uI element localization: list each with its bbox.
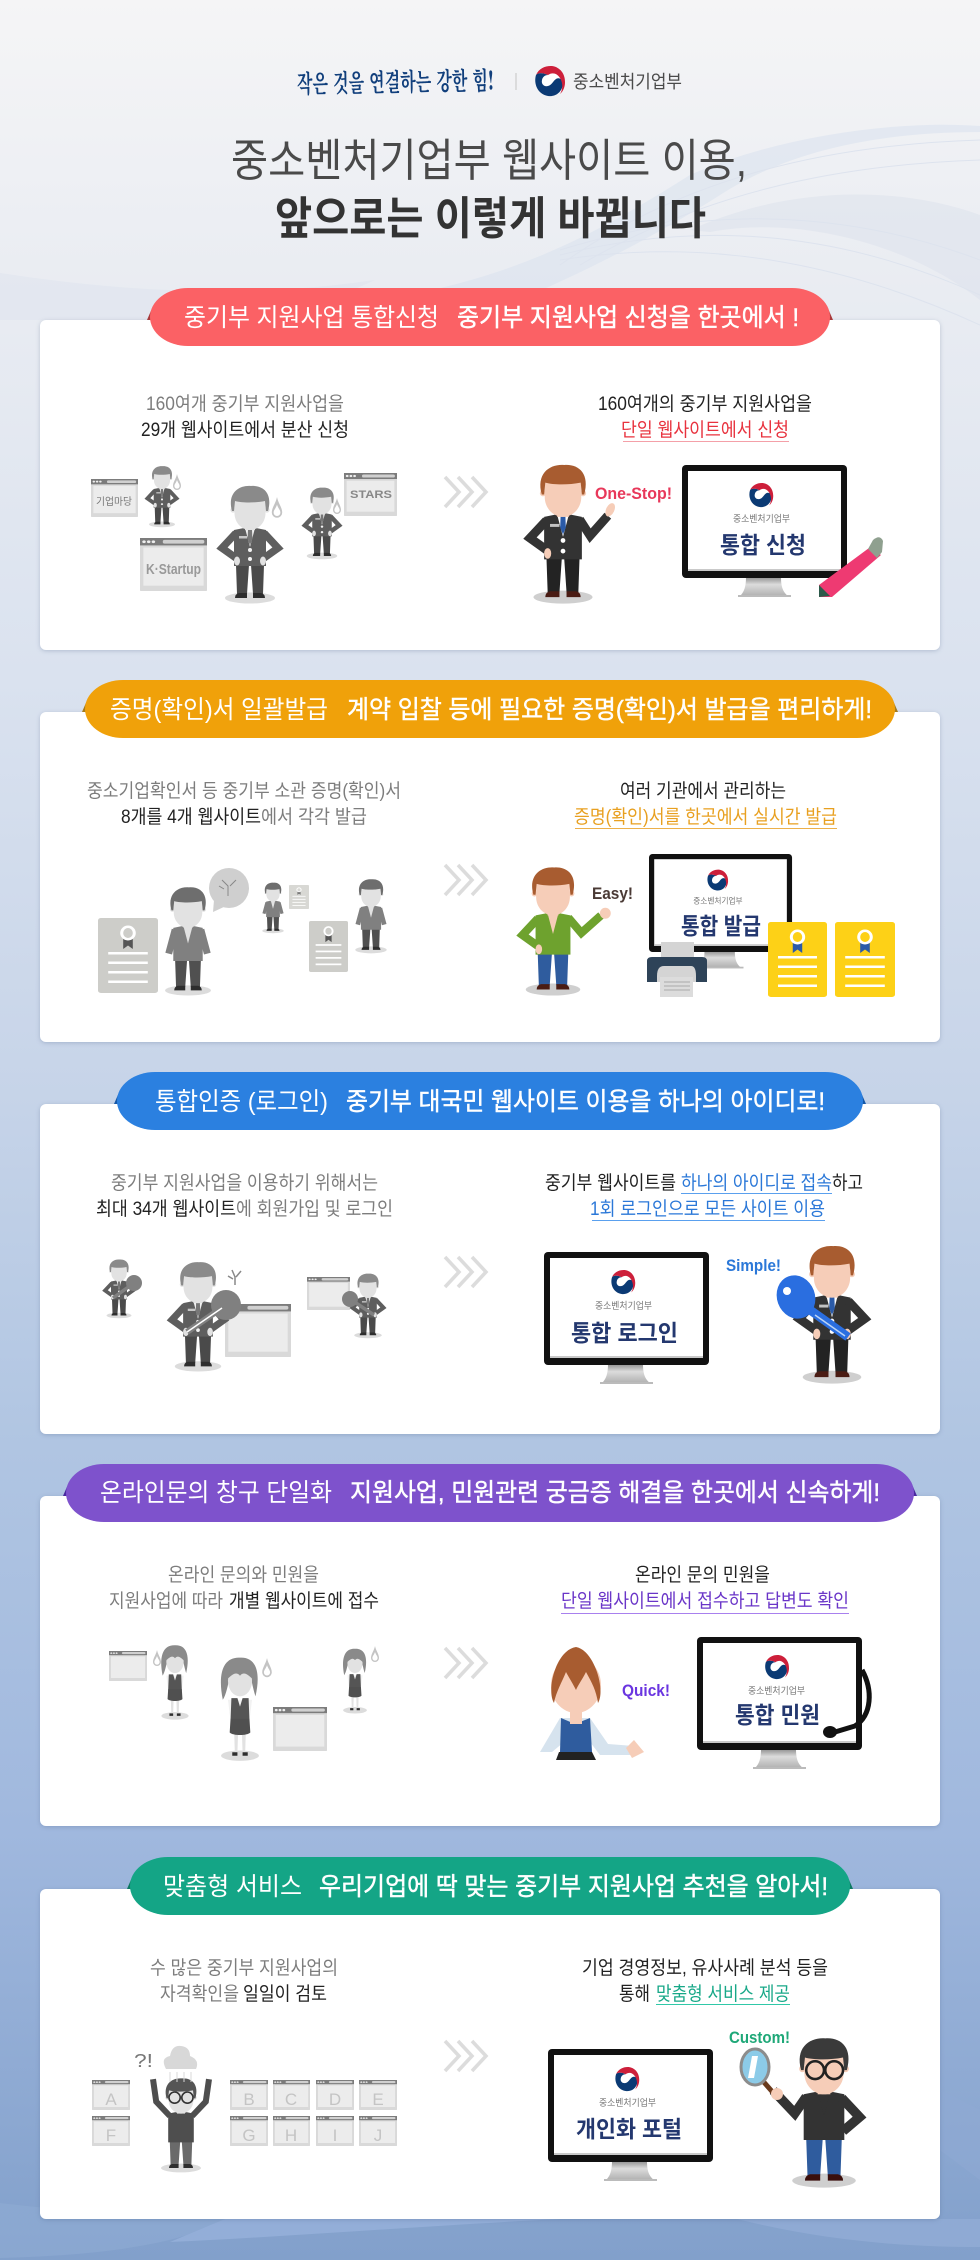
text before: 중소기업확인서 등 중기부 소관 증명(확인)서 (87, 780, 401, 802)
text before: 지원사업에 따라 (109, 1590, 223, 1612)
illustration before (91, 466, 397, 604)
text before: 일일이 검토 (243, 1983, 327, 2005)
text after: 단일 웹사이트에서 신청 (621, 419, 789, 441)
illustration before: ?! (134, 2051, 153, 2071)
illustration after: man, monitor, printer, certificates: Easy! (592, 884, 633, 903)
text before (150, 1957, 338, 2005)
title: 중소벤처기업부 웹사이트 이용, (231, 135, 747, 186)
illustration after: monitor and man with key: Simple! (726, 1256, 781, 1275)
illustration after: man and monitor: 통합 신청 (720, 532, 806, 558)
header logos (297, 61, 682, 101)
illustration after: agent and monitor (540, 1637, 869, 1769)
card background (40, 1104, 940, 1434)
illustration after: man, monitor, printer, certificates (522, 854, 895, 997)
pill heading (82, 680, 898, 738)
title: 앞으로는 이렇게 바뀝니다 (275, 193, 706, 244)
text after: 여러 기관에서 관리하는 (620, 780, 786, 802)
text before: 온라인 문의와 민원을 (168, 1564, 319, 1586)
text after: 중기부 웹사이트를 (545, 1172, 676, 1194)
card background (40, 712, 940, 1042)
arrow (445, 1257, 486, 1287)
background waves bottom (0, 2090, 980, 2258)
illustration before: B (243, 2090, 255, 2109)
text before (96, 1172, 393, 1220)
text after: 증명(확인)서를 한곳에서 실시간 발급 (574, 806, 837, 828)
panel: integrated application (40, 288, 940, 650)
ministry emblem (535, 66, 565, 96)
illustration before: A (105, 2090, 117, 2109)
text before: 중기부 지원사업을 이용하기 위해서는 (111, 1172, 378, 1194)
illustration before: E (372, 2090, 384, 2109)
pill heading: 지원사업, 민원관련 궁금증 해결을 한곳에서 신속하게! (350, 1479, 880, 1507)
pill heading: 중기부 지원사업 통합신청 (184, 304, 439, 332)
background waves top (0, 125, 980, 325)
text before: 29개 웹사이트에서 분산 신청 (141, 419, 349, 441)
illustration before: I (333, 2126, 337, 2145)
pill heading: 중기부 대국민 웹사이트 이용을 하나의 아이디로! (346, 1088, 825, 1116)
text after (545, 1172, 863, 1221)
illustration after: monitor and man with magnifier: 개인화 포털 (576, 2116, 682, 2142)
arrow (445, 865, 486, 895)
illustration after: man, monitor, printer, certificates: 중소벤처기업부 (693, 895, 743, 905)
text after (574, 780, 837, 829)
illustration after: man and monitor (530, 465, 883, 604)
text before (141, 393, 349, 441)
text before: 에서 각각 발급 (261, 806, 367, 828)
illustration after: agent and monitor: Quick! (622, 1681, 670, 1700)
illustration before: 기업마당 (96, 495, 132, 508)
panel: online inquiry (40, 1464, 940, 1826)
pill heading (127, 1857, 853, 1915)
text before: 수 많은 중기부 지원사업의 (150, 1957, 338, 1979)
illustration before: STARS (350, 489, 392, 501)
illustration after: monitor and man with magnifier (548, 2028, 860, 2188)
text after: 기업 경영정보, 유사사례 분석 등을 (582, 1957, 828, 1979)
illustration before: K·Startup (146, 561, 201, 578)
illustration after: monitor and man with key: 중소벤처기업부 (595, 1300, 652, 1312)
text before: 160여개 중기부 지원사업을 (146, 393, 344, 415)
pill heading: 증명(확인)서 일괄발급 (110, 696, 328, 724)
text after (582, 1957, 828, 2005)
text after: 단일 웹사이트에서 접수하고 답변도 확인 (561, 1590, 849, 1612)
illustration before: H (285, 2126, 297, 2145)
panel: customized service (40, 1857, 940, 2219)
title (231, 135, 747, 244)
illustration after: monitor and man with magnifier: Custom! (729, 2028, 790, 2047)
illustration after: agent and monitor: 통합 민원 (735, 1702, 820, 1728)
illustration before (105, 1259, 383, 1371)
text before (109, 1564, 379, 1612)
text before: 최대 34개 웹사이트 (96, 1198, 236, 1220)
card background (40, 1496, 940, 1826)
text after: 하나의 아이디로 접속 (681, 1172, 832, 1194)
text after (561, 1564, 849, 1614)
text after: 맞춤형 서비스 제공 (656, 1983, 790, 2005)
ministry name: 중소벤처기업부 (573, 72, 682, 92)
illustration after: monitor and man with magnifier: 중소벤처기업부 (599, 2097, 656, 2109)
illustration after: man and monitor: One-Stop! (595, 484, 672, 503)
pill heading: 온라인문의 창구 단일화 (100, 1479, 332, 1507)
pill heading: 맞춤형 서비스 (163, 1873, 302, 1901)
text after: 1회 로그인으로 모든 사이트 이용 (590, 1198, 825, 1220)
illustration before (98, 868, 387, 995)
text after: 온라인 문의 민원을 (635, 1564, 770, 1586)
text after: 하고 (832, 1172, 863, 1194)
illustration after: man, monitor, printer, certificates: 통합 발급 (681, 913, 761, 939)
illustration after: man and monitor: 중소벤처기업부 (733, 513, 790, 525)
pill heading: 우리기업에 딱 맞는 중기부 지원사업 추천을 알아서! (319, 1873, 828, 1901)
text before: 자격확인을 (160, 1983, 239, 2005)
illustration before: G (242, 2126, 256, 2145)
pill heading (114, 1072, 866, 1130)
arrow (445, 477, 486, 507)
card background (40, 1889, 940, 2219)
panel: integrated login (40, 1072, 940, 1434)
pill heading: 중기부 지원사업 신청을 한곳에서 ! (457, 304, 799, 332)
text after: 160여개의 중기부 지원사업을 (598, 393, 812, 415)
illustration after: agent and monitor: 중소벤처기업부 (748, 1685, 805, 1697)
pill heading: 통합인증 (로그인) (155, 1088, 328, 1116)
illustration after: monitor and man with key: 통합 로그인 (571, 1320, 678, 1346)
illustration before: F (106, 2126, 116, 2145)
illustration before: J (374, 2126, 382, 2145)
pill heading (63, 1464, 917, 1522)
illustration before (92, 2046, 397, 2172)
illustration after: monitor and man with key (544, 1246, 865, 1384)
arrow (445, 2041, 486, 2071)
panel: certificate issuance (40, 680, 940, 1042)
text before (87, 780, 401, 828)
illustration before: C (285, 2090, 297, 2109)
pill heading (147, 288, 833, 346)
illustration before (109, 1645, 379, 1761)
card background (40, 320, 940, 650)
text before: 에 회원가입 및 로그인 (236, 1198, 393, 1220)
pill heading: 계약 입찰 등에 필요한 증명(확인)서 발급을 편리하게! (347, 696, 872, 724)
text before: 개별 웹사이트에 접수 (229, 1590, 379, 1612)
text after: 통해 (619, 1983, 650, 2005)
arrow (445, 1648, 486, 1678)
text after (598, 393, 812, 442)
text before: 8개를 4개 웹사이트 (121, 806, 261, 828)
slogan: 작은 것을 연결하는 강한 힘! (297, 61, 494, 101)
illustration before: D (329, 2090, 341, 2109)
